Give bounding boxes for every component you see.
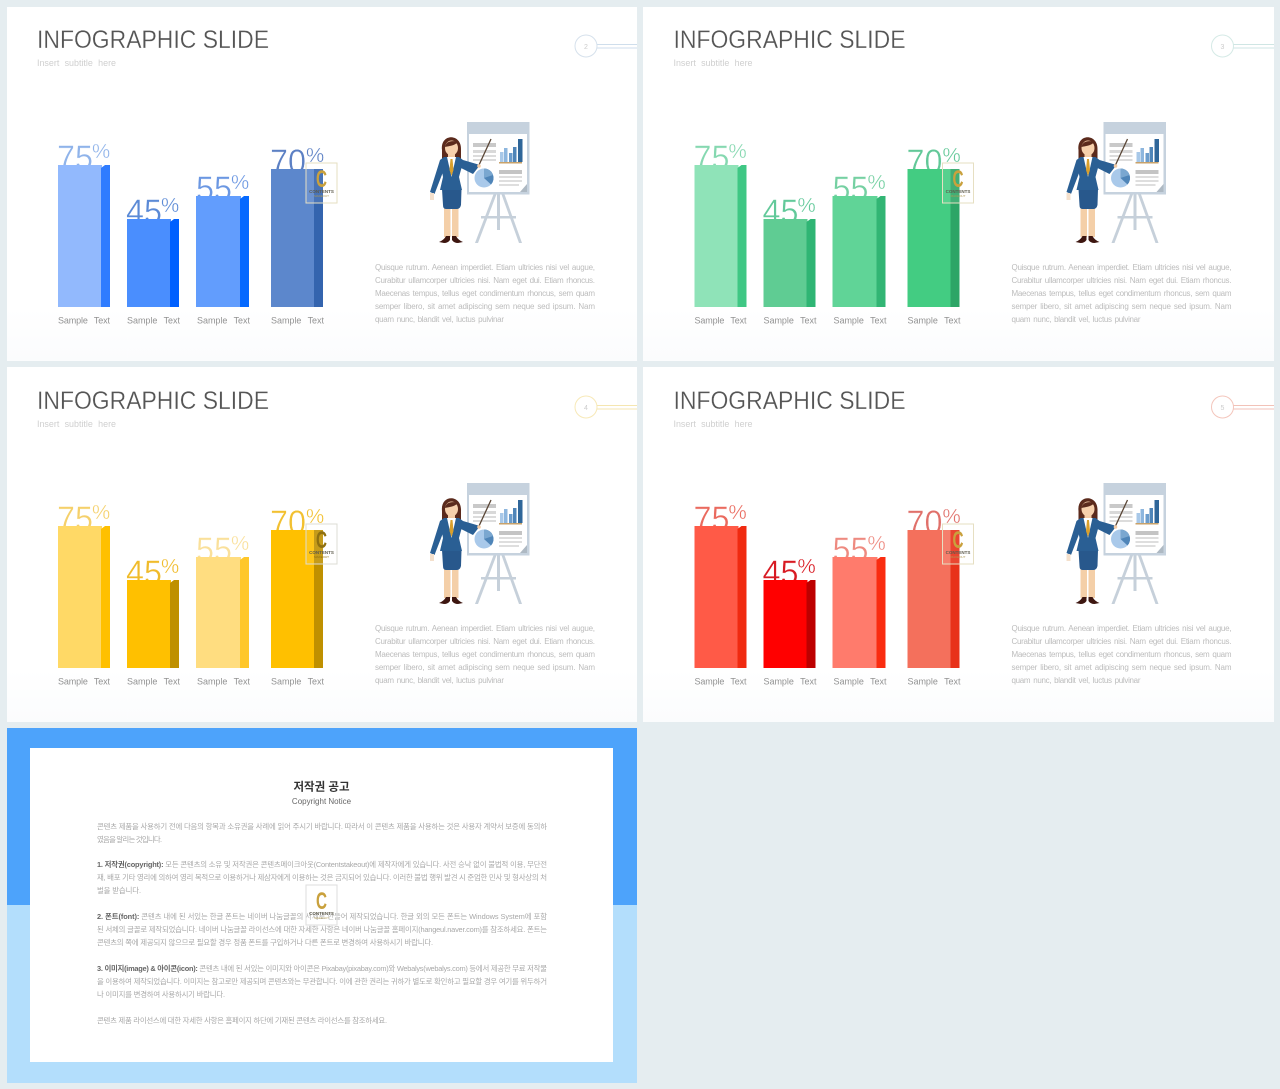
- bar: 70%: Sample Text: [908, 676, 961, 686]
- subtitle: Insert subtitle here: [674, 58, 752, 69]
- bar: 75%: [694, 139, 747, 326]
- body text: quam nunc, blandit vel, luctus pulvinar: [375, 315, 504, 324]
- bar: 55%: 55: [832, 531, 868, 569]
- bar: 75%: [57, 139, 110, 326]
- watermark: C: [316, 888, 327, 915]
- bar: 70%: 70: [270, 143, 306, 181]
- bar: 45%: [126, 554, 180, 686]
- bar: 45%: Sample Text: [127, 676, 180, 686]
- bar: 75%: [694, 500, 747, 686]
- subtitle: Insert subtitle here: [37, 58, 116, 69]
- body text: semper libero, sit amet adipiscing sem neque sed ipsum. Nam: [1012, 302, 1232, 311]
- page number badge: [1212, 396, 1274, 418]
- body text: Maecenas tempus, tellus eget condimentum rhoncus, sem quam: [375, 289, 595, 298]
- bar: 45%: %: [798, 555, 816, 578]
- section 3: image and icon: 을 이용하여 제작되었습니다. 이미지는 참고로만 제공되며 콘텐츠와는 무관합니다. 이에 관한 권리는 귀하가 별도로 확인하고 필요할 경우 여기를 위두하거: [97, 977, 547, 986]
- body text: Quisque rutrum. Aenean imperdiet. Etiam ultricies nisi vel augue,: [375, 624, 595, 633]
- page number badge: [575, 35, 637, 57]
- bar: 70%: Sample Text: [271, 676, 324, 686]
- watermark: CONTENTS: [946, 550, 970, 555]
- bar: 70%: %: [306, 505, 324, 528]
- bar: 55%: [832, 531, 887, 686]
- section 2: font: 2. 폰트(font): 콘텐츠 내에 된 서있는 한글 폰트는 네이버 나눔글꼴의 서체로 만들어 제작되었습니다. 한글 외의 모든 폰트는 Windows System에 포함: [97, 912, 547, 921]
- bar: 75%: %: [92, 501, 110, 524]
- bar: 70%: 70: [906, 143, 942, 181]
- body text: [375, 263, 595, 324]
- bar: 55%: [196, 170, 250, 326]
- subtitle: Insert subtitle here: [674, 419, 752, 430]
- watermark: CONTENTS: [946, 189, 970, 194]
- bar: 75%: 75: [57, 500, 93, 538]
- body text: semper libero, sit amet adipiscing sem neque sed ipsum. Nam: [375, 663, 595, 672]
- panel: green bar chart slide: [643, 7, 1274, 361]
- bar: 55%: 55: [196, 170, 232, 208]
- body text: quam nunc, blandit vel, luctus pulvinar: [375, 676, 504, 685]
- section 1: copyright: 벌을 받습니다.: [97, 886, 141, 895]
- bar: 55%: %: [231, 171, 249, 194]
- bar: 75%: %: [92, 140, 110, 163]
- bar: 45%: Sample Text: [127, 316, 180, 326]
- bar: 55%: Sample Text: [197, 676, 250, 686]
- icon: presenter with chart board: [1066, 483, 1166, 604]
- page number badge: 3: [1221, 44, 1225, 51]
- title: INFOGRAPHIC SLIDE: [674, 26, 906, 54]
- intro text: [97, 822, 547, 844]
- section 3: image and icon: 3. 이미지(image) & 아이콘(icon): 콘텐츠 내에 된 서있는 이미지와 아이콘은 Pixabay(pixabay.com)와 Webalys(webalys.com) 등에서 제공한 무료 저작물: [97, 964, 547, 973]
- bar: 45%: %: [161, 555, 179, 578]
- section 1: copyright: 1. 저작권(copyright): 모든 콘텐츠의 소유 및 저작권은 콘텐츠메이크아웃(Contentstakeout)에 제작자에게 있습니다. 사전 승낙 없이 불법적 이용, 무단전: [97, 860, 547, 869]
- body text: Quisque rutrum. Aenean imperdiet. Etiam ultricies nisi vel augue,: [375, 263, 595, 272]
- bar: 45%: 45: [762, 193, 798, 231]
- panel: red bar chart slide: [643, 367, 1274, 722]
- bar: 70%: %: [942, 505, 961, 528]
- bar: 45%: Sample Text: [764, 676, 817, 686]
- watermark: MAKEOUT: [314, 194, 329, 198]
- bar: 45%: %: [798, 194, 816, 217]
- watermark: MAKEOUT: [314, 916, 329, 920]
- title: INFOGRAPHIC SLIDE: [37, 387, 269, 415]
- watermark: [306, 163, 337, 203]
- intro text: 콘텐츠 제품을 사용하기 전에 다음의 항목과 소유권을 사례에 읽어 주시기 바랍니다. 따라서 이 콘텐츠 제품을 사용하는 것은 사용자 계약서 보증에 동의하: [97, 822, 547, 831]
- bar: 70%: 70: [906, 504, 942, 542]
- body text: Curabitur ullamcorper ultricies nisi. Nam eget dui. Etiam rhoncus.: [1012, 276, 1232, 285]
- bar: 55%: 55: [196, 531, 232, 569]
- body text: quam nunc, blandit vel, luctus pulvinar: [1012, 676, 1141, 685]
- bar: 75%: %: [728, 501, 747, 524]
- watermark: [306, 885, 337, 925]
- watermark: CONTENTS: [309, 550, 334, 555]
- page number badge: [1212, 35, 1274, 57]
- body text: Maecenas tempus, tellus eget condimentum rhoncus, sem quam: [1012, 650, 1232, 659]
- body text: Maecenas tempus, tellus eget condimentum rhoncus, sem quam: [1012, 289, 1232, 298]
- bar: 45%: Sample Text: [764, 316, 817, 326]
- section 2: font: 된 서체의 글꼴로 제작되었습니다. 네이버 나눔글꼴 라이선스에 대한 자세한 사항은 네이버 나눔글꼴 홈페이지(hangeul.naver.com)를 참조하세요. 폰트는: [97, 925, 547, 934]
- body text: quam nunc, blandit vel, luctus pulvinar: [1012, 315, 1141, 324]
- watermark: [942, 163, 974, 203]
- body text: Quisque rutrum. Aenean imperdiet. Etiam ultricies nisi vel augue,: [1012, 263, 1232, 272]
- page number badge: [575, 396, 637, 418]
- body text: [1012, 263, 1232, 324]
- watermark: C: [952, 166, 964, 193]
- bar: 70%: Sample Text: [271, 316, 324, 326]
- section 3: image and icon: [97, 964, 547, 999]
- bar: 45%: [126, 193, 180, 326]
- watermark: [306, 524, 337, 564]
- panel: copyright notice slide: [7, 728, 637, 1083]
- bar: 75%: Sample Text: [58, 676, 110, 686]
- body text: Curabitur ullamcorper ultricies nisi. Nam eget dui. Etiam rhoncus.: [1012, 637, 1232, 646]
- bar: 55%: [196, 531, 250, 686]
- body text: Curabitur ullamcorper ultricies nisi. Nam eget dui. Etiam rhoncus.: [375, 276, 595, 285]
- title: INFOGRAPHIC SLIDE: [674, 387, 906, 415]
- bar: 55%: [832, 170, 887, 326]
- watermark: C: [316, 166, 327, 193]
- bar: 70%: 70: [270, 504, 306, 542]
- bar: 75%: 75: [57, 139, 93, 177]
- bar: 70%: Sample Text: [908, 316, 961, 326]
- intro text: 였음을 알리는 것입니다.: [97, 835, 162, 844]
- body text: Maecenas tempus, tellus eget condimentum rhoncus, sem quam: [375, 650, 595, 659]
- bar: 75%: Sample Text: [58, 316, 110, 326]
- bar: 55%: Sample Text: [197, 316, 250, 326]
- bar: 45%: [762, 193, 817, 326]
- icon: presenter with chart board: [1066, 122, 1166, 243]
- body text: Curabitur ullamcorper ultricies nisi. Nam eget dui. Etiam rhoncus.: [375, 637, 595, 646]
- bar: 75%: [57, 500, 110, 686]
- bar: 55%: Sample Text: [834, 316, 887, 326]
- section 1: copyright: 재, 배포 기타 영리에 의하여 영리 목적으로 이용하거나 제삼자에게 이용하는 것은 금지되어 있습니다. 이러한 불법 행위 발견 시 준엄한 민사 및 형사상의 처: [97, 873, 547, 882]
- section 1: copyright: [97, 860, 547, 895]
- bar: 55%: %: [231, 532, 249, 555]
- bar: 70%: %: [942, 144, 961, 167]
- watermark: C: [952, 527, 964, 554]
- bar: 55%: Sample Text: [834, 676, 887, 686]
- watermark: CONTENTS: [309, 911, 334, 916]
- closing note: 콘텐츠 제품 라이선스에 대한 자세한 사항은 홈페이지 하단에 기재된 콘텐츠 라이선스를 참조하세요.: [97, 1016, 387, 1025]
- body text: semper libero, sit amet adipiscing sem neque sed ipsum. Nam: [1012, 663, 1232, 672]
- panel: yellow bar chart slide: [7, 367, 637, 722]
- bar: 70%: %: [306, 144, 324, 167]
- bar: 45%: 45: [126, 193, 162, 231]
- subtitle: Insert subtitle here: [37, 419, 116, 430]
- bar: 45%: [762, 554, 817, 686]
- subheading: copyright notice: Copyright Notice: [292, 797, 352, 806]
- bar: 45%: 45: [762, 554, 798, 592]
- body text: [375, 624, 595, 685]
- watermark: MAKEOUT: [951, 194, 966, 198]
- bar: 70%: [906, 504, 961, 686]
- bar: 75%: 75: [694, 139, 730, 177]
- bar: 70%: [906, 143, 961, 326]
- bar: 45%: %: [161, 194, 179, 217]
- page number badge: 4: [584, 405, 588, 412]
- watermark: CONTENTS: [309, 189, 334, 194]
- icon: presenter with chart board: [430, 122, 530, 243]
- page number badge: 5: [1221, 405, 1225, 412]
- page number badge: 2: [584, 44, 588, 51]
- bar: 45%: 45: [126, 554, 162, 592]
- watermark: C: [316, 527, 327, 554]
- title: INFOGRAPHIC SLIDE: [37, 26, 269, 54]
- section 2: font: 콘텐츠의 쪽에 제공되지 않으므로 필요할 경우 정품 폰트를 구입하거나 다른 폰트로 변경하여 사용하시기 바랍니다.: [97, 938, 433, 947]
- watermark: MAKEOUT: [951, 555, 966, 559]
- bar: 70%: [270, 143, 324, 326]
- panel: blue bar chart slide: [7, 7, 637, 361]
- bar: 70%: [270, 504, 324, 686]
- bar: 55%: %: [868, 532, 886, 555]
- watermark: MAKEOUT: [314, 555, 329, 559]
- bar: 55%: 55: [832, 170, 868, 208]
- body text: semper libero, sit amet adipiscing sem neque sed ipsum. Nam: [375, 302, 595, 311]
- bar: 55%: %: [868, 171, 886, 194]
- bar: 75%: Sample Text: [694, 316, 747, 326]
- heading: copyright: 저작권 공고: [293, 780, 350, 794]
- bar: 75%: 75: [694, 500, 730, 538]
- bar: 75%: %: [728, 140, 747, 163]
- section 2: font: [97, 912, 547, 947]
- section 3: image and icon: 나 이미지를 변경하여 사용하시기 바랍니다.: [97, 990, 225, 999]
- bar: 75%: Sample Text: [694, 676, 747, 686]
- body text: Quisque rutrum. Aenean imperdiet. Etiam ultricies nisi vel augue,: [1012, 624, 1232, 633]
- icon: presenter with chart board: [430, 483, 530, 604]
- body text: [1012, 624, 1232, 685]
- watermark: [942, 524, 974, 564]
